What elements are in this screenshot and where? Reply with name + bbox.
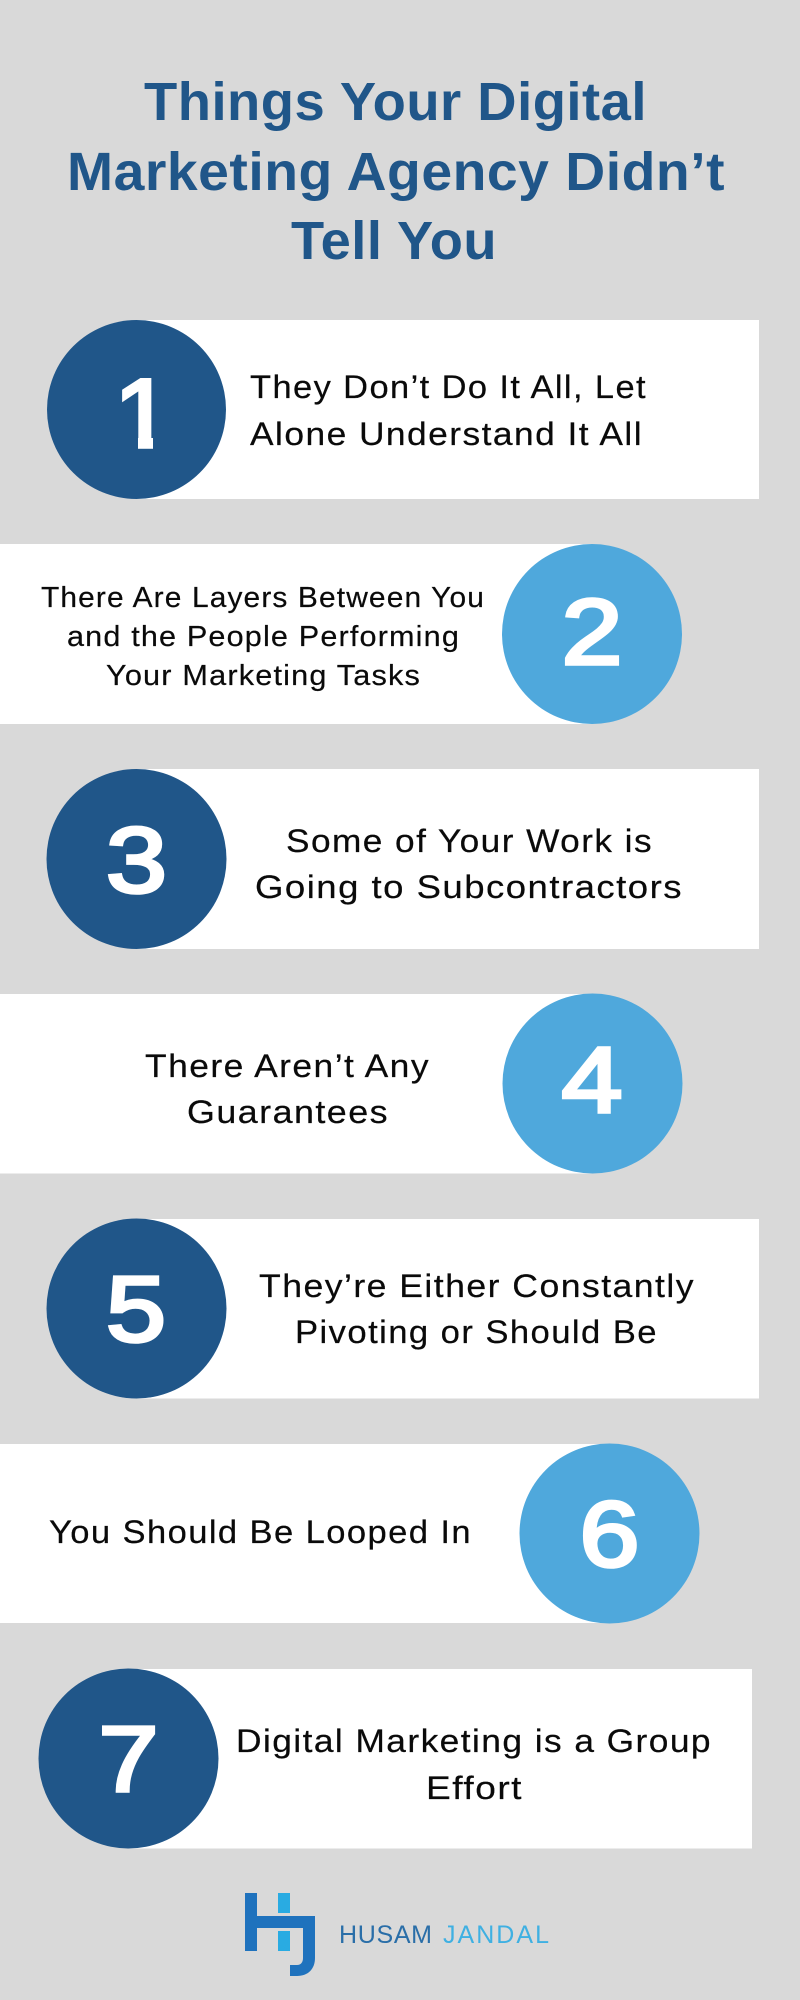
text: item 1: They Don’t Do It All, Let bbox=[250, 369, 647, 405]
text: item 7: Digital Marketing is a Group bbox=[236, 1723, 712, 1759]
icon: number 4 badge bbox=[502, 994, 682, 1174]
text: item 4: There Aren’t Any bbox=[145, 1048, 430, 1084]
icon: number 1 badge bbox=[47, 320, 226, 499]
text: item 5: Pivoting or Should Be bbox=[295, 1314, 658, 1350]
text: item 5 bbox=[259, 1268, 695, 1350]
title bbox=[67, 72, 725, 271]
text: item 2 bbox=[41, 582, 485, 692]
panel: item 1 bbox=[47, 320, 759, 499]
text: item 2: Your Marketing Tasks bbox=[106, 660, 421, 692]
text: item 7: Effort bbox=[426, 1770, 523, 1806]
title: Things Your Digital bbox=[144, 72, 647, 132]
wordmark: JANDAL bbox=[443, 1921, 549, 1949]
text: item 5: They’re Either Constantly bbox=[259, 1268, 695, 1304]
icon: number 3 badge: 3 bbox=[106, 808, 167, 912]
icon: number 7 badge bbox=[38, 1668, 218, 1848]
text: item 4: Guarantees bbox=[187, 1094, 389, 1130]
panel: item 3 bbox=[46, 769, 759, 949]
icon: number 1 badge: 1 bbox=[114, 359, 172, 468]
icon: number 4 badge: 4 bbox=[562, 1028, 622, 1132]
icon: number 6 badge bbox=[520, 1444, 700, 1624]
text: item 2: There Are Layers Between You bbox=[41, 582, 485, 614]
panel: item 6 bbox=[0, 1444, 700, 1624]
panel: item 5 bbox=[46, 1218, 759, 1398]
icon: number 5 badge bbox=[46, 1218, 226, 1398]
text: item 2: and the People Performing bbox=[67, 621, 460, 653]
title: Marketing Agency Didn’t bbox=[67, 142, 725, 202]
text: item 4 bbox=[145, 1048, 430, 1130]
text: item 3: Going to Subcontractors bbox=[255, 869, 683, 905]
panel: item 7 bbox=[38, 1668, 752, 1848]
text: item 7 bbox=[236, 1723, 712, 1806]
wordmark: HUSAM bbox=[339, 1921, 432, 1949]
logo: Husam Jandal bbox=[245, 1893, 549, 1976]
panel: item 2 bbox=[0, 544, 682, 724]
wordmark bbox=[339, 1921, 549, 1949]
text: item 3: Some of Your Work is bbox=[286, 823, 653, 859]
panel: item 4 bbox=[0, 994, 682, 1174]
icon: number 5 badge: 5 bbox=[106, 1257, 166, 1361]
icon: number 6 badge: 6 bbox=[580, 1482, 640, 1586]
icon: HJ monogram bbox=[245, 1893, 315, 1976]
text: item 6: You Should Be Looped In bbox=[49, 1514, 472, 1550]
icon: number 3 badge bbox=[46, 769, 226, 949]
text: item 3 bbox=[255, 823, 683, 905]
icon: number 2 badge bbox=[502, 544, 682, 724]
text: item 1 bbox=[250, 369, 647, 452]
icon: number 7 badge: 7 bbox=[98, 1707, 158, 1811]
text: item 1: Alone Understand It All bbox=[250, 416, 643, 452]
title: Tell You bbox=[291, 211, 497, 271]
icon: number 2 badge: 2 bbox=[562, 580, 622, 684]
